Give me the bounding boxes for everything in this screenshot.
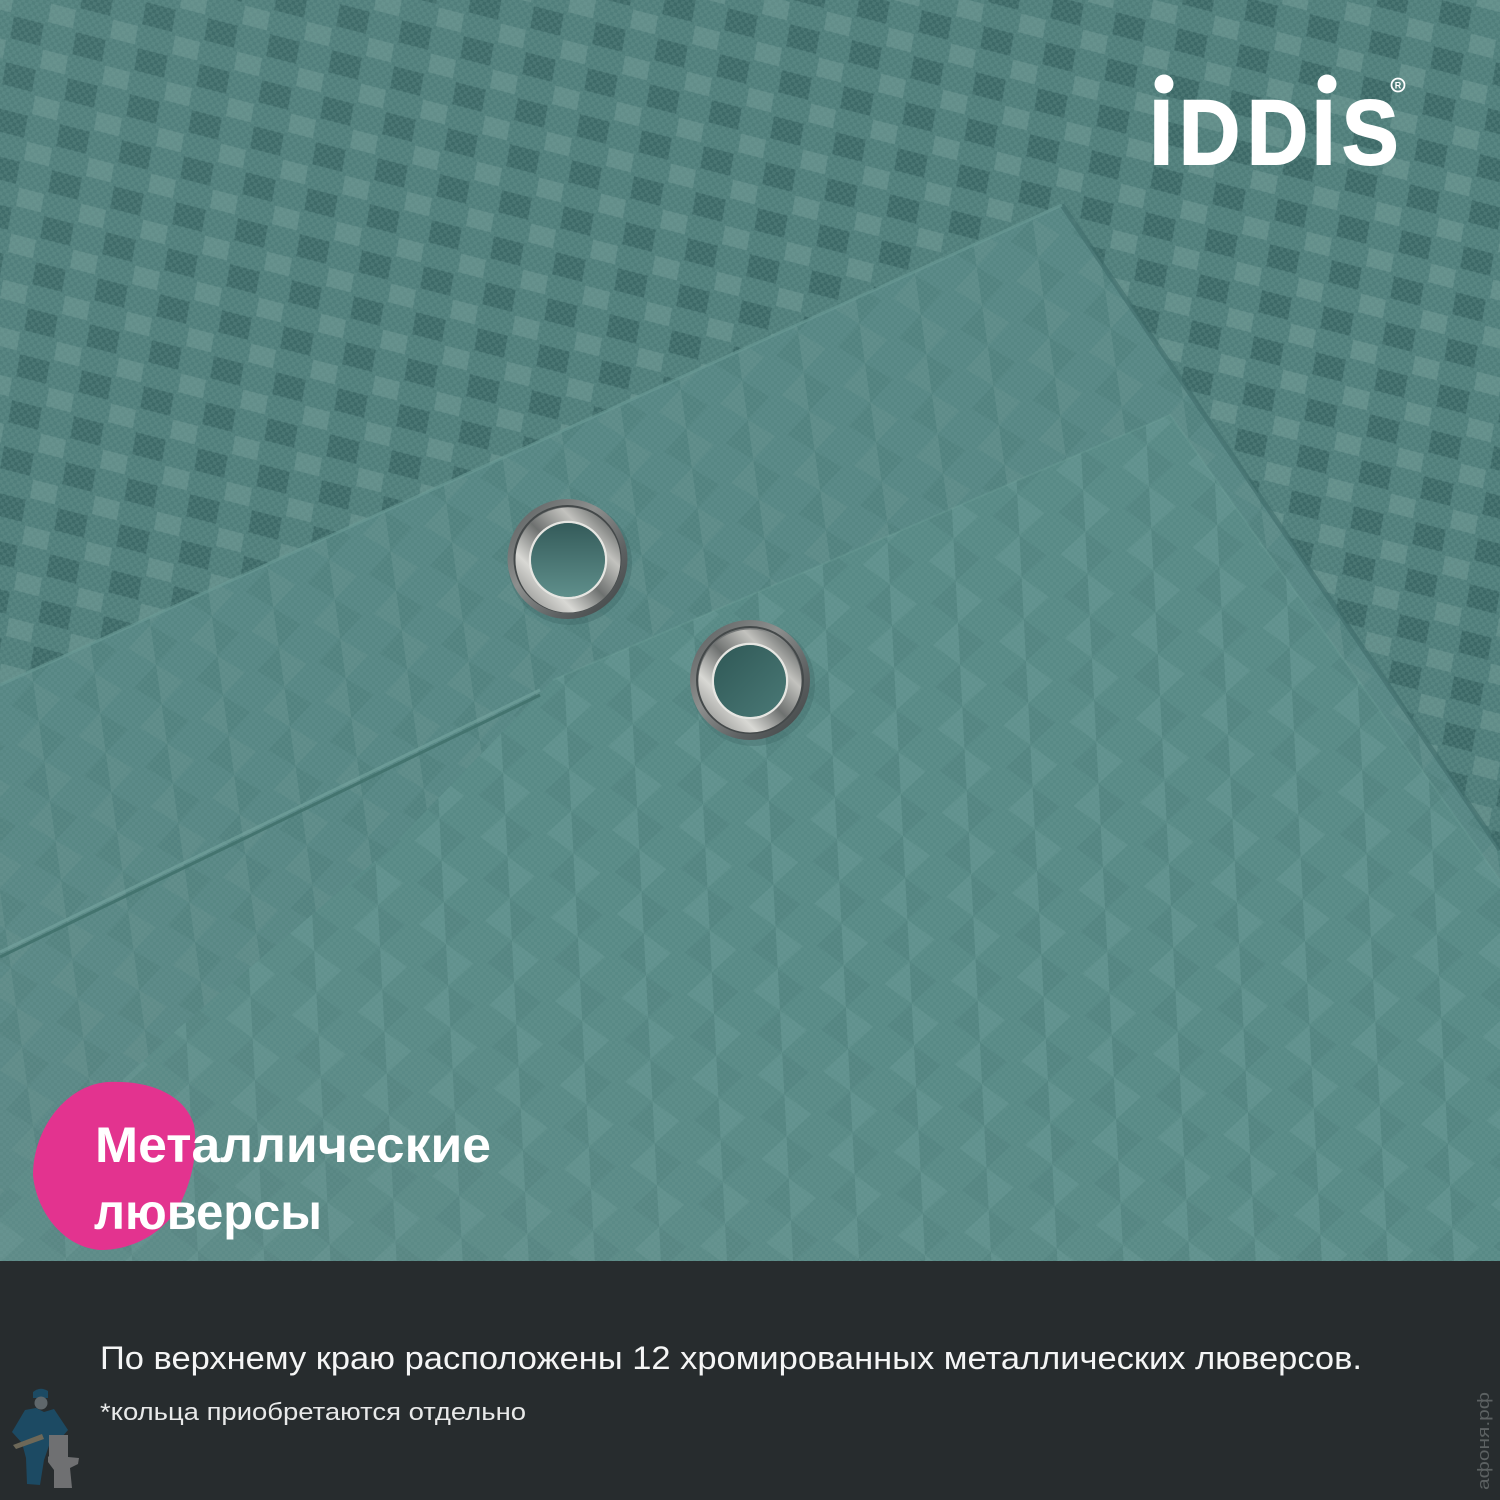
heading: люверсы — [94, 1184, 322, 1240]
footnote: *кольца приобретаются отдельно — [100, 1399, 526, 1426]
pink blob behind heading — [33, 1082, 195, 1250]
registered mark: R — [1395, 80, 1402, 90]
dark footer band — [0, 1261, 1500, 1500]
grommet: right metal eyelet — [690, 620, 815, 746]
hem crease — [0, 695, 540, 957]
lower curtain layer — [0, 415, 1500, 1261]
folded curtain flap — [0, 205, 1500, 1262]
grommet: left metal eyelet — [508, 499, 632, 625]
lower layer edge — [553, 415, 1500, 880]
watermark: афоня.рф — [1474, 1392, 1493, 1490]
body text: По верхнему краю расположены 12 хромированных металлических люверсов. — [100, 1340, 1362, 1376]
heading: Металлические — [95, 1117, 491, 1173]
icon: plumber with toilet — [12, 1389, 79, 1488]
registered mark — [1392, 78, 1404, 92]
logo: IDDIS: IDDIS — [1149, 81, 1398, 184]
flap edge shadow — [1062, 205, 1500, 850]
